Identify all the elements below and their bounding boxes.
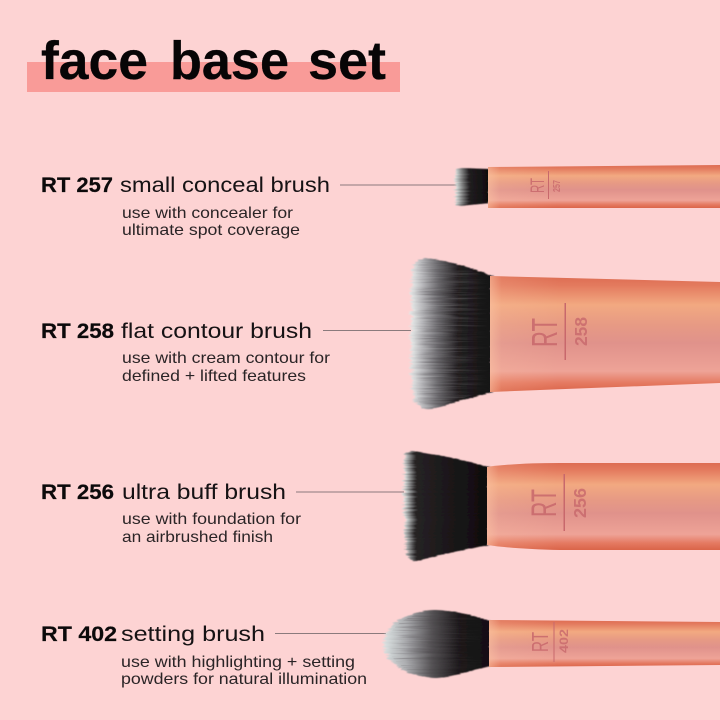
handle 402 — [489, 620, 720, 667]
description: foundation: an airbrushed finish — [122, 529, 273, 546]
handle logo 258: 258 — [571, 317, 591, 346]
bristles 258 — [411, 258, 492, 409]
handle logo 257: 257 — [552, 180, 563, 192]
handle logo 402 — [527, 622, 571, 662]
heading: RT 257: RT 257 — [41, 174, 113, 197]
heading: RT 402: RT 402 — [41, 623, 117, 646]
brush: RT 258 — [411, 258, 720, 409]
bristles 256 — [404, 451, 489, 561]
leader line 256 — [296, 492, 404, 493]
description: cream contour: use with cream contour for — [122, 350, 330, 367]
panel: RT 402 label — [41, 622, 367, 688]
description: cream contour: defined + lifted features — [122, 368, 306, 385]
handle 257 — [488, 165, 720, 208]
panel: RT 256 label — [41, 480, 301, 546]
leader line 402 — [275, 633, 386, 634]
handle logo 402: RT — [527, 632, 553, 652]
bristles 402 — [384, 610, 491, 678]
heading: RT 256: RT 256 — [41, 481, 114, 504]
title highlight bar — [27, 62, 400, 92]
handle logo 256 — [525, 474, 590, 531]
title text: base — [170, 31, 289, 91]
handle logo 258: RT — [524, 318, 565, 347]
description: highlighting: use with highlighting + setting — [121, 654, 355, 671]
brush name: setting brush: setting brush — [121, 622, 265, 646]
brush: RT 257 — [456, 165, 720, 208]
handle 256 — [487, 463, 720, 550]
leader line 258 — [323, 330, 411, 331]
description: concealer: ultimate spot coverage — [122, 222, 300, 239]
panel: RT 258 label — [41, 319, 330, 385]
handle logo 257: RT — [528, 178, 549, 193]
handle logo 256: 256 — [570, 488, 590, 518]
handle logo 402: 402 — [559, 629, 571, 653]
description: foundation: use with foundation for — [122, 511, 301, 528]
title — [27, 31, 400, 92]
brush: RT 402 — [384, 610, 720, 678]
panel: RT 257 label — [41, 173, 330, 239]
handle 258 — [490, 276, 720, 392]
leader line 257 — [340, 184, 457, 186]
brush name: flat contour brush: flat contour brush — [121, 319, 312, 343]
handle logo 256: RT — [525, 489, 564, 517]
handle logo 257 — [528, 171, 563, 199]
brush name: ultra buff brush: ultra buff brush — [122, 480, 286, 504]
brush: RT 256 — [404, 451, 720, 561]
bristles 257 — [456, 168, 490, 206]
heading: RT 258: RT 258 — [41, 320, 114, 343]
handle logo 258 — [524, 303, 591, 360]
description: concealer: use with concealer for — [122, 205, 293, 222]
title text: set — [308, 31, 386, 91]
brush name: small conceal brush: small conceal brush — [120, 173, 330, 197]
title text: face — [41, 31, 148, 91]
description: highlighting: powders for natural illumination — [121, 671, 367, 688]
